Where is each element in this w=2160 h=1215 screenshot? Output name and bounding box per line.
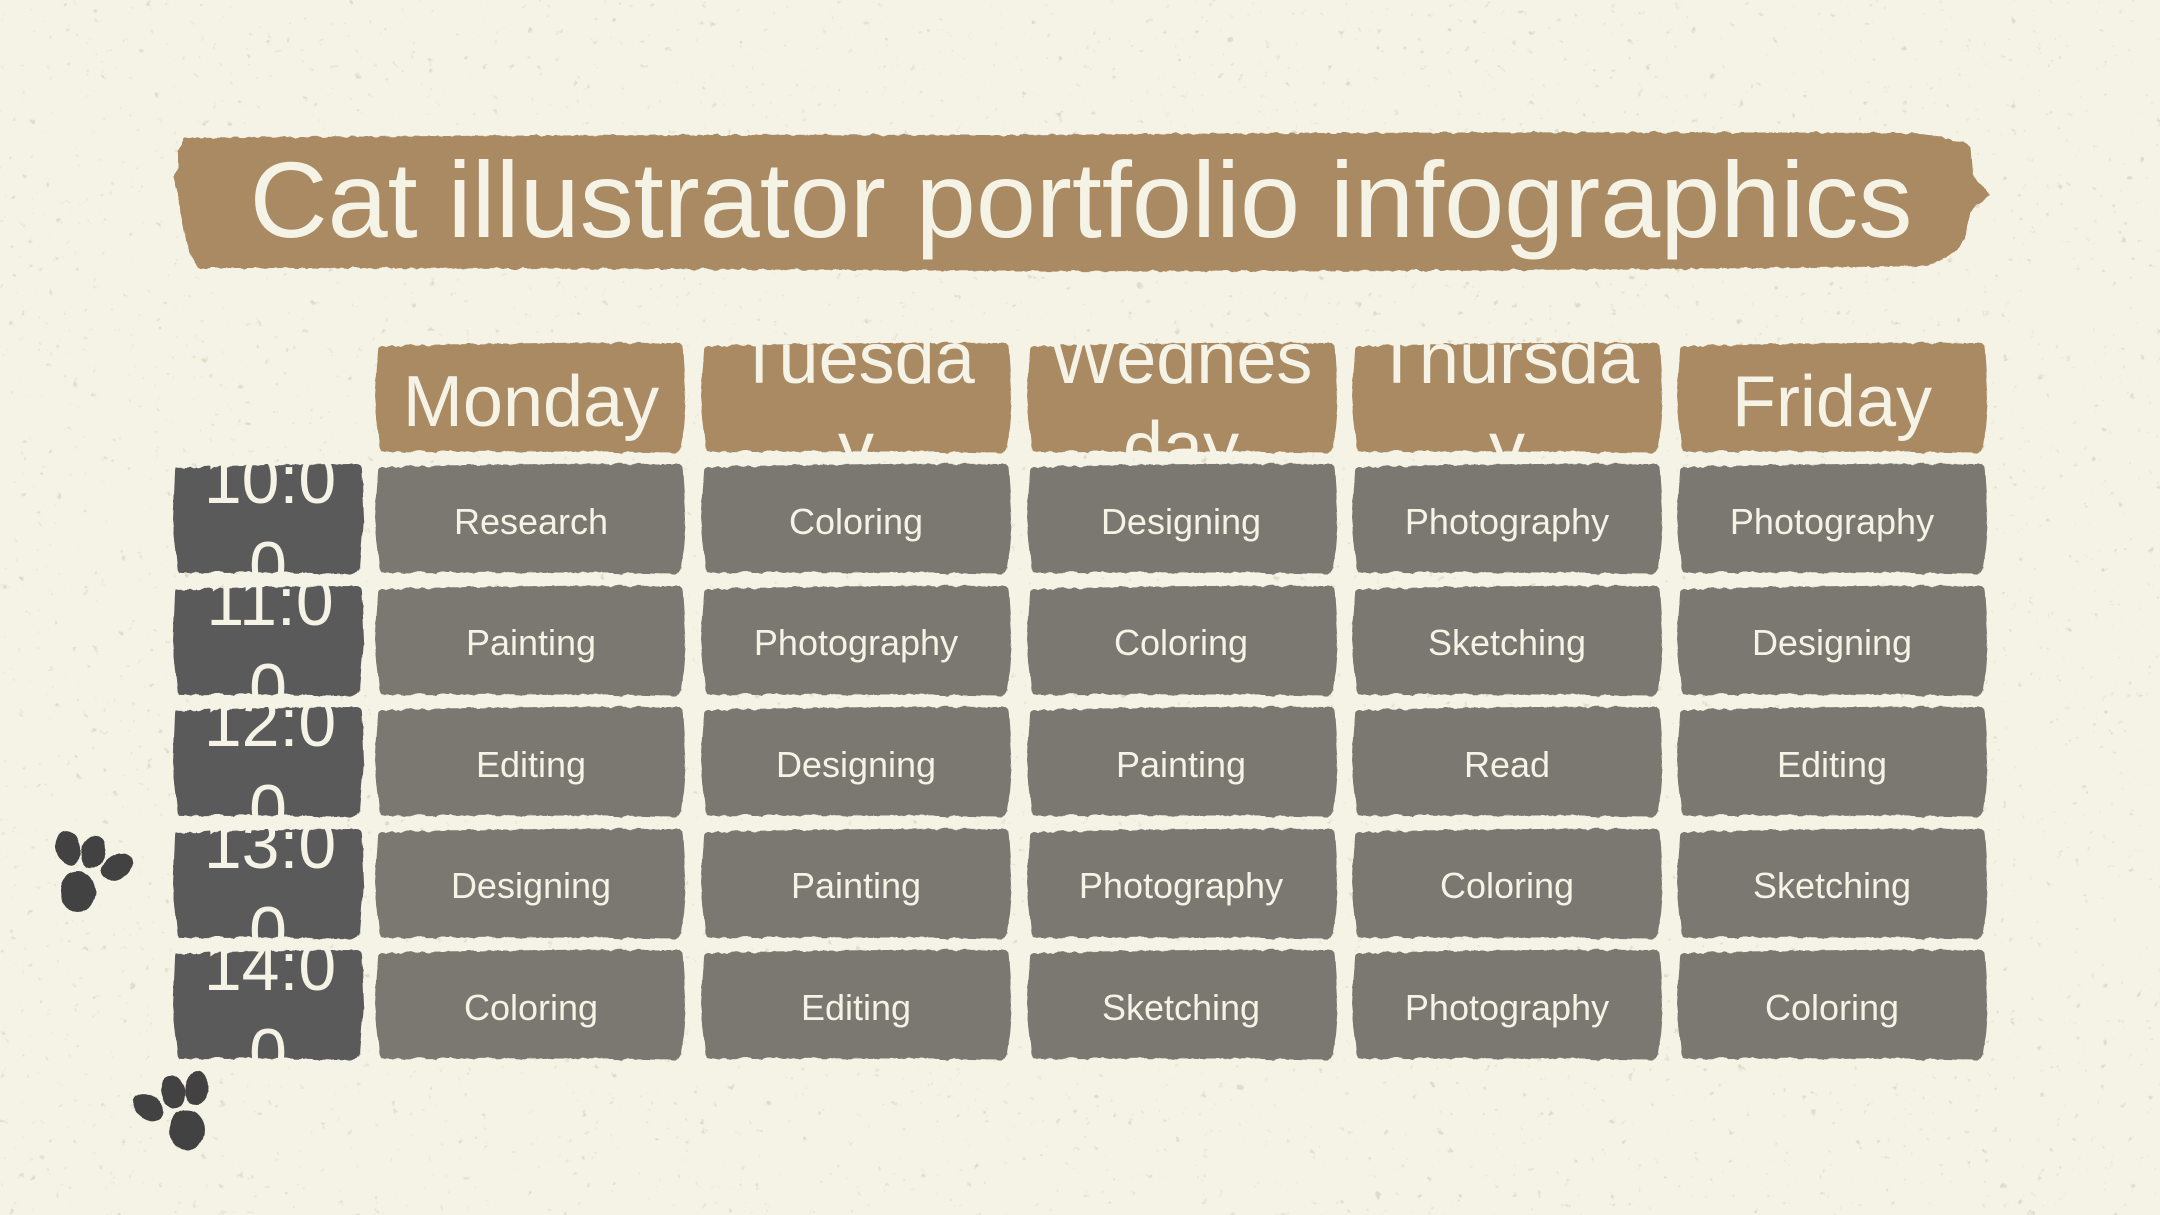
header: Wednesday: Wednes — [1050, 319, 1312, 399]
time label 11:00: 11:0 — [206, 564, 334, 640]
activity: Designing: Designing — [451, 865, 611, 906]
header: Friday — [1677, 343, 1988, 453]
activity: Sketching — [1352, 586, 1663, 696]
activity: Designing: Designing — [776, 744, 936, 785]
time label 13:00: 0 — [249, 893, 287, 969]
activity: Designing — [701, 707, 1012, 817]
activity: Coloring: Coloring — [789, 501, 923, 542]
row: 13:00 — [173, 807, 1988, 969]
activity: Photography: Photography — [1730, 501, 1934, 542]
activity: Coloring — [1352, 829, 1663, 939]
icon: cat paw print left — [53, 829, 138, 911]
activity: Painting: Painting — [1116, 744, 1246, 785]
activity: Designing: Designing — [1752, 622, 1912, 663]
activity: Editing: Editing — [1777, 744, 1887, 785]
activity: Coloring: Coloring — [1114, 622, 1248, 663]
activity: Editing: Editing — [476, 744, 586, 785]
activity: Designing: Designing — [1101, 501, 1261, 542]
activity: Designing — [1027, 464, 1338, 574]
header: Tuesday — [701, 319, 1012, 488]
time label 10:00: 10:0 — [204, 442, 336, 518]
activity: Coloring — [1027, 586, 1338, 696]
activity: Photography — [1677, 464, 1988, 574]
activity: Painting: Painting — [791, 865, 921, 906]
activity: Photography: Photography — [1405, 987, 1609, 1028]
activity: Sketching: Sketching — [1428, 622, 1586, 663]
activity: Painting — [701, 829, 1012, 939]
header: Monday — [375, 343, 686, 453]
header: Friday: Friday — [1732, 362, 1932, 442]
time label 14:00: 0 — [249, 1015, 287, 1091]
time label 12:00: 0 — [249, 771, 287, 847]
activity: Coloring — [1677, 950, 1988, 1060]
day headers — [375, 319, 1988, 488]
header: Thursday: Thursda — [1375, 319, 1639, 399]
time label 12:00 — [173, 685, 364, 847]
activity: Editing — [1677, 707, 1988, 817]
row: 11:00 — [173, 564, 1988, 726]
activity: Sketching: Sketching — [1753, 865, 1911, 906]
activity: Coloring — [375, 950, 686, 1060]
activity: Research: Research — [454, 501, 608, 542]
title banner — [172, 132, 1990, 271]
time label 11:00: 0 — [249, 650, 287, 726]
row: 14:00 — [173, 929, 1988, 1091]
activity: Painting — [1027, 707, 1338, 817]
activity: Photography: Photography — [754, 622, 958, 663]
activity: Editing: Editing — [801, 987, 911, 1028]
activity: Sketching — [1677, 829, 1988, 939]
activity: Coloring: Coloring — [464, 987, 598, 1028]
activity: Designing — [375, 829, 686, 939]
activity: Photography — [1352, 950, 1663, 1060]
activity: Read: Read — [1464, 744, 1550, 785]
header: Wednesday: day — [1123, 408, 1239, 488]
header: Tuesday: y — [838, 408, 874, 488]
time label 11:00 — [173, 564, 364, 726]
activity: Editing — [701, 950, 1012, 1060]
activity: Photography: Photography — [1079, 865, 1283, 906]
activity: Editing — [375, 707, 686, 817]
header: Monday: Monday — [403, 362, 659, 442]
activity: Photography — [1027, 829, 1338, 939]
time label 12:00: 12:0 — [204, 685, 336, 761]
activity: Photography — [1352, 464, 1663, 574]
header: Tuesday: Tuesda — [737, 319, 975, 399]
time label 10:00: 0 — [249, 528, 287, 604]
header: Wednesday — [1027, 319, 1338, 488]
time label 14:00 — [173, 929, 364, 1091]
time label 14:00: 14:0 — [204, 929, 336, 1005]
header: Thursday: y — [1489, 408, 1525, 488]
row: 10:00 — [173, 442, 1988, 604]
activity: Painting: Painting — [466, 622, 596, 663]
activity: Coloring — [701, 464, 1012, 574]
time label 13:00: 13:0 — [204, 807, 336, 883]
time label 13:00 — [173, 807, 364, 969]
activity: Photography — [701, 586, 1012, 696]
time label 10:00 — [173, 442, 364, 604]
activity: Designing — [1677, 586, 1988, 696]
activity: Coloring: Coloring — [1440, 865, 1574, 906]
title text: Cat illustrator portfolio infographics — [250, 139, 1912, 260]
activity: Photography: Photography — [1405, 501, 1609, 542]
activity: Painting — [375, 586, 686, 696]
activity: Sketching — [1027, 950, 1338, 1060]
row: 12:00 — [173, 685, 1988, 847]
activity: Research — [375, 464, 686, 574]
activity: Sketching: Sketching — [1102, 987, 1260, 1028]
header: Thursday — [1352, 319, 1663, 488]
activity: Coloring: Coloring — [1765, 987, 1899, 1028]
icon: cat paw print bottom — [127, 1070, 210, 1150]
activity: Read — [1352, 707, 1663, 817]
